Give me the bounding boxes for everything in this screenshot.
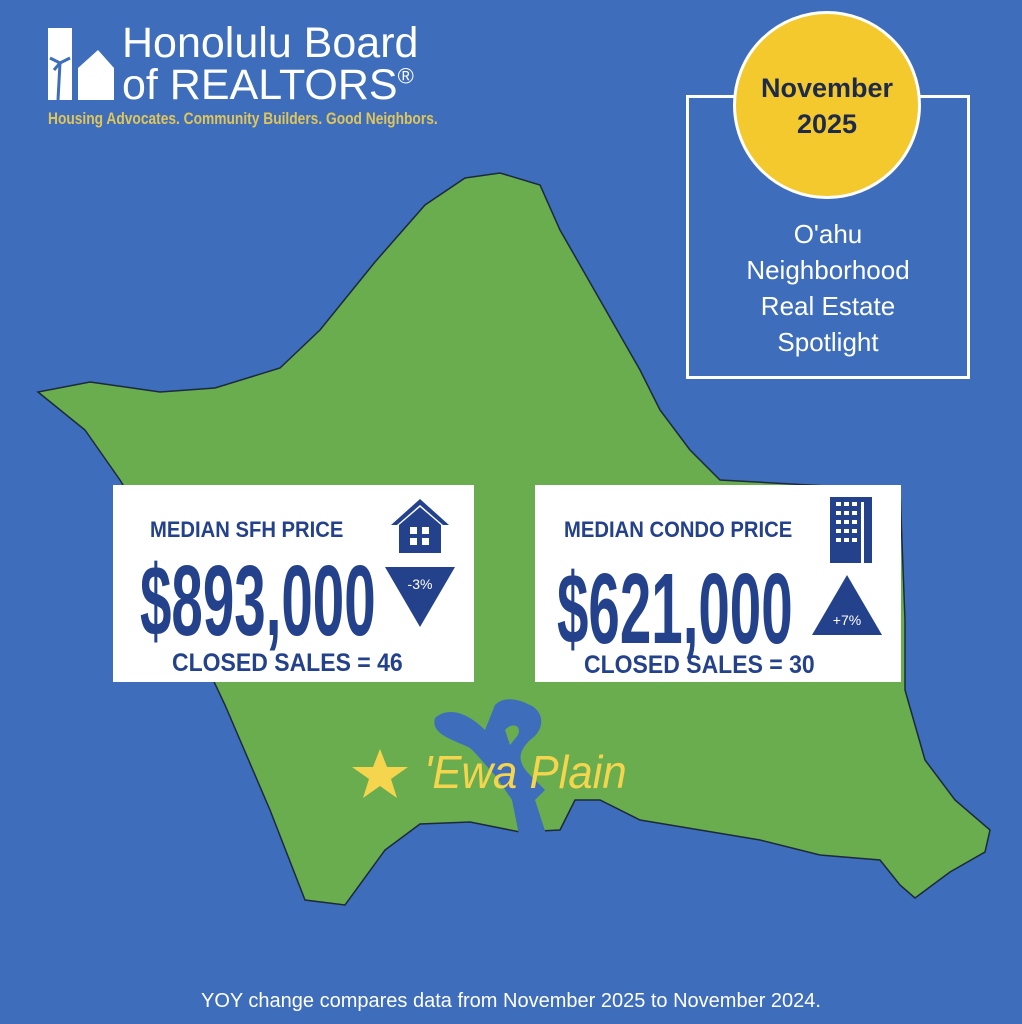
- icon: star: [352, 749, 408, 798]
- subtitle: [746, 219, 910, 357]
- subtitle: Neighborhood: [746, 255, 910, 285]
- panel: Condo: CLOSED SALES = 30: [584, 651, 815, 679]
- panel: SFH: [113, 485, 474, 682]
- down triangle: [385, 567, 455, 627]
- icon: house: [391, 499, 449, 553]
- footer note: YOY change compares data from November 2025 to November 2024.: [201, 990, 821, 1012]
- tagline: Housing Advocates. Community Builders. Good Neighbors.: [48, 109, 438, 128]
- up triangle: [812, 575, 882, 635]
- subtitle: Spotlight: [777, 327, 879, 357]
- date circle: November: [761, 73, 893, 103]
- panel: Condo: $621,000: [557, 553, 793, 665]
- subtitle: Real Estate: [761, 291, 895, 321]
- logo text: of REALTORS®: [122, 61, 414, 109]
- logo text: [122, 19, 418, 109]
- logo: [48, 19, 438, 128]
- neighborhood label: 'Ewa Plain: [424, 746, 627, 798]
- panel: Condo: [535, 485, 901, 682]
- icon: building: [830, 497, 872, 563]
- panel: SFH: CLOSED SALES = 46: [172, 649, 403, 677]
- logo text: Honolulu Board: [122, 19, 418, 67]
- panel: SFH: MEDIAN SFH PRICE: [150, 517, 343, 542]
- date circle: 2025: [797, 109, 857, 139]
- subtitle: O'ahu: [794, 219, 862, 249]
- up triangle: +7%: [833, 612, 861, 628]
- title box: [686, 95, 970, 379]
- panel: SFH: $893,000: [140, 545, 376, 657]
- icon: logo buildings: [48, 28, 114, 100]
- down triangle: -3%: [408, 576, 432, 592]
- date circle: [733, 11, 921, 199]
- panel: Condo: MEDIAN CONDO PRICE: [564, 517, 792, 542]
- Pearl Harbor: [434, 699, 548, 840]
